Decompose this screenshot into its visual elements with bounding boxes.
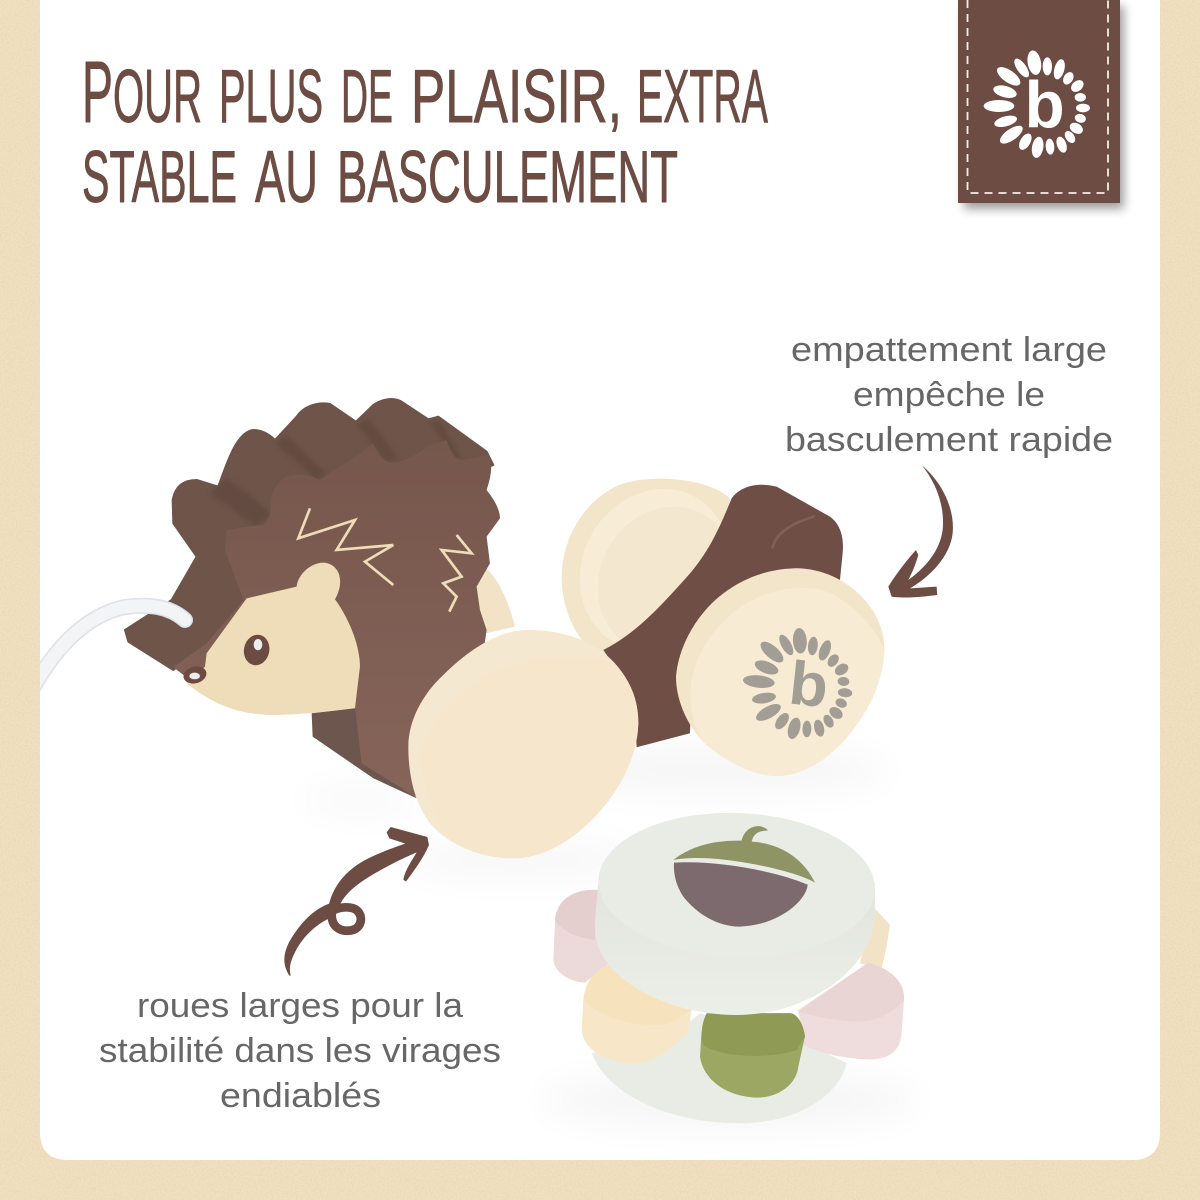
- title: POUR: [82, 44, 202, 141]
- icon: acorn: [673, 826, 815, 927]
- string: [30, 606, 185, 693]
- bottom disc: [592, 1013, 847, 1123]
- nose: [182, 664, 208, 686]
- front right wheel with logo: [676, 568, 884, 776]
- title: PLUS: [219, 54, 323, 138]
- text block: roues larges: endiablés: [220, 1077, 381, 1115]
- cream spines: [298, 508, 393, 585]
- icon: logo on wheel: [737, 622, 859, 746]
- toy: acorn stacking rattle: [553, 808, 904, 1123]
- title: PLAISIR,: [411, 54, 622, 138]
- front face: [173, 440, 500, 797]
- brown axle block: [603, 485, 843, 747]
- right pink petal: [798, 963, 904, 1059]
- top disc side: [595, 883, 875, 1015]
- text block: empattement large: basculement rapide: [785, 421, 1113, 459]
- dark side extrusion: [125, 399, 493, 670]
- text block: roues larges: stabilité dans les virages: [99, 1032, 501, 1070]
- rear cream petal: [860, 907, 890, 968]
- icon: brand logo: b: [1025, 67, 1065, 141]
- text block: roues larges: [99, 987, 501, 1115]
- top disc face: [596, 808, 877, 962]
- icon: logo on wheel: b: [786, 649, 832, 721]
- title: AU: [255, 137, 318, 218]
- left cream petal: [582, 963, 692, 1063]
- side ridge shading: [210, 418, 462, 527]
- title: BASCULEMENT: [337, 137, 678, 218]
- soft floor shadows: [300, 745, 920, 1130]
- cream face: [187, 563, 360, 715]
- title: DE: [341, 54, 393, 138]
- title: [82, 44, 768, 218]
- text block: empattement large: empêche le: [853, 376, 1045, 414]
- title: STABLE: [82, 137, 237, 218]
- text block: empattement large: empattement large: [791, 331, 1107, 369]
- arrow: pointing to rear wheel: [888, 465, 953, 597]
- title: EXTRA: [637, 54, 768, 138]
- olive petal: [700, 1013, 805, 1098]
- front big wheel: [408, 630, 638, 858]
- arrow: pointing to front wheel: [284, 827, 429, 976]
- rear wheel and axle: [552, 462, 843, 747]
- left pink petal: [553, 890, 613, 983]
- icon: brand logo: [984, 49, 1090, 159]
- text block: empattement large: [785, 331, 1113, 459]
- toy: hedgehog pull toy: [30, 399, 884, 858]
- brand label tag: [958, 0, 1124, 209]
- eye: [241, 632, 272, 668]
- text block: roues larges: roues larges pour la: [137, 987, 463, 1025]
- hedgehog body: [30, 399, 515, 798]
- tail piece: [477, 568, 515, 633]
- lower side extrusion: [312, 707, 417, 798]
